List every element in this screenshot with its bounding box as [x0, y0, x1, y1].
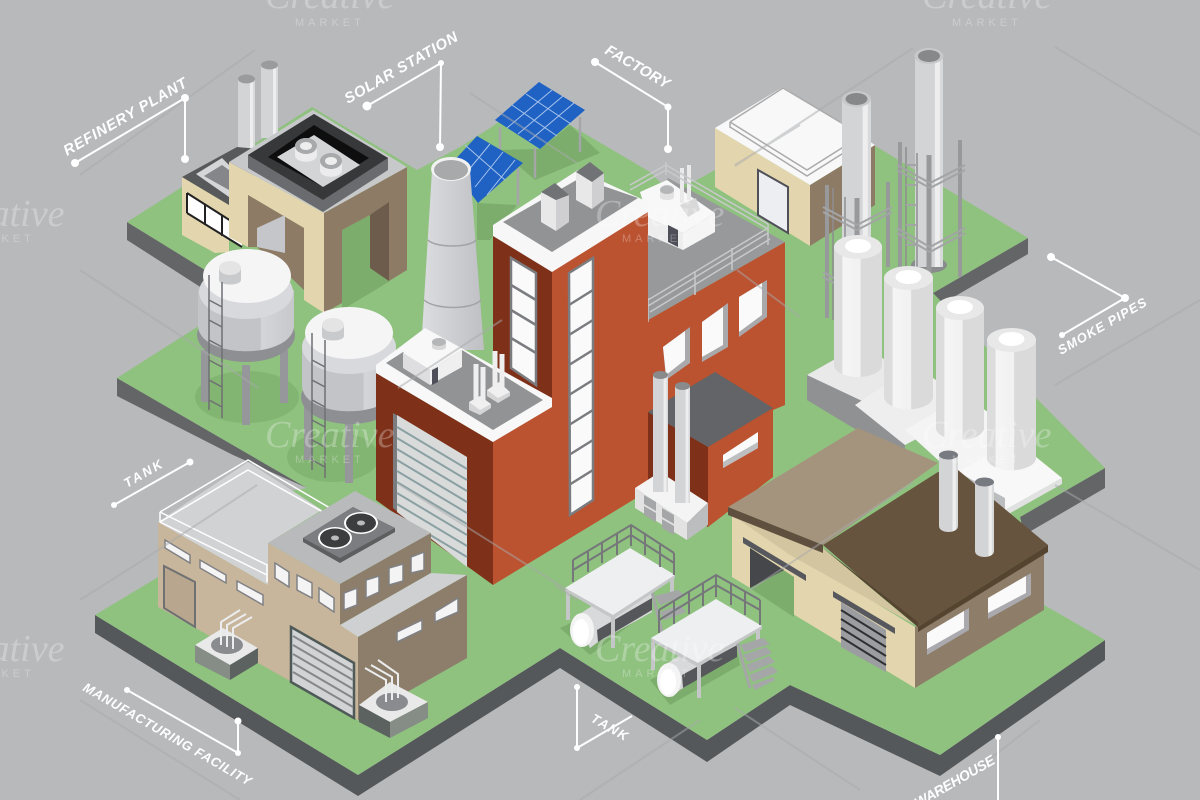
lower right wing — [340, 573, 467, 637]
tank right — [301, 307, 399, 483]
watermarks: Creative — [595, 193, 725, 235]
watermarks: Creative — [922, 414, 1052, 456]
windows — [663, 327, 690, 380]
smoke pipes white cylinders — [807, 235, 1062, 516]
warehouse — [728, 428, 1048, 688]
watermarks: MARKET — [952, 17, 1022, 29]
cylinder two — [660, 640, 737, 697]
tall smoke pipes and scaffolds — [823, 48, 965, 320]
label: solar station: SOLAR STATION — [342, 28, 462, 107]
low roof — [158, 462, 322, 585]
right tall window — [569, 258, 593, 515]
red tower — [493, 162, 648, 585]
door — [164, 566, 195, 627]
upper block — [268, 491, 431, 584]
label: factory: FACTORY — [602, 42, 675, 93]
roof pipes — [469, 382, 510, 414]
label: smoke pipes: SMOKE PIPES — [1055, 294, 1149, 358]
tank left — [197, 249, 295, 425]
refinery plant — [182, 60, 407, 313]
chimneys — [238, 60, 278, 155]
windows — [165, 540, 458, 642]
left tall window — [511, 258, 536, 385]
watermarks: Creative — [595, 628, 725, 670]
roller door — [393, 413, 398, 512]
central chimney — [421, 157, 484, 350]
watermarks: MARKET — [622, 668, 692, 680]
label: tank bottom: TANK — [588, 711, 632, 744]
label: refinery plant: REFINERY PLANT — [60, 74, 192, 159]
roof boxes — [541, 192, 556, 231]
watermarks — [0, 0, 1052, 680]
platforms with tanks and stairs — [565, 525, 778, 698]
red annex with dark roof — [648, 372, 773, 527]
ground platform — [95, 100, 1105, 796]
rear building — [715, 87, 875, 246]
watermarks: MARKET — [622, 233, 692, 245]
watermarks: MARKET — [952, 454, 1022, 466]
left wall — [158, 522, 358, 720]
roller door — [291, 627, 354, 718]
watermarks: MARKET — [295, 454, 365, 466]
label: tank bottom — [574, 684, 632, 751]
label: tank left: TANK — [121, 456, 166, 491]
solar station — [450, 82, 585, 205]
watermarks: MARKET — [295, 17, 365, 29]
platform one — [568, 575, 672, 648]
platform two — [653, 628, 758, 698]
label: factory — [591, 42, 675, 153]
rails — [630, 162, 770, 322]
red factory lower block — [376, 328, 552, 585]
watermarks: Creative — [265, 414, 395, 456]
label: solar station — [342, 28, 462, 151]
ac units — [195, 610, 428, 738]
label: tank left — [111, 456, 194, 508]
roof — [229, 110, 407, 213]
twin stacks on base — [635, 371, 708, 540]
rooftop box — [648, 218, 683, 250]
cylinder one — [575, 590, 652, 648]
red factory annex wall and roof — [630, 162, 785, 490]
manufacturing facility — [158, 460, 467, 720]
roof box — [403, 353, 430, 385]
left wing — [182, 147, 270, 253]
fans — [303, 507, 395, 563]
label: smoke pipes — [1047, 253, 1149, 358]
arch tan face — [229, 162, 324, 313]
label: manufacturing facility: MANUFACTURING FACILITY — [80, 680, 255, 789]
